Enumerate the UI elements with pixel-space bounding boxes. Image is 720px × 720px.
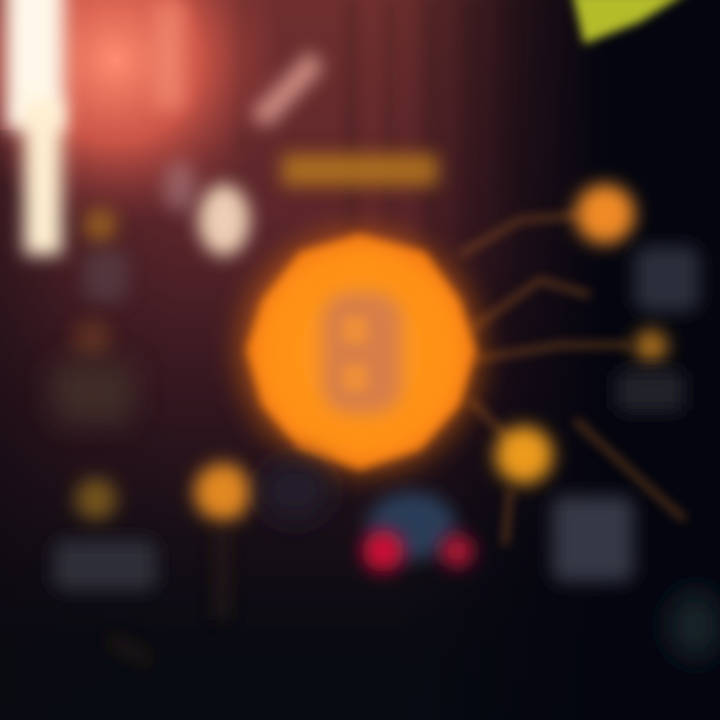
light beam: top left xyxy=(6,0,185,255)
node: top right orange xyxy=(575,184,635,244)
faint connector: lower left xyxy=(110,530,222,660)
icon: yellow-green shape top right xyxy=(572,0,688,44)
panel: far right edge xyxy=(667,589,720,661)
decorative streak: top centre xyxy=(250,50,324,128)
node: lower centre-left orange xyxy=(194,463,252,521)
left column: top icon xyxy=(83,208,128,302)
decorative blob: below coin left xyxy=(259,458,331,522)
coin symbol xyxy=(322,292,402,414)
left column: middle panel xyxy=(52,319,134,424)
panel: lower right grey xyxy=(552,496,634,582)
left column: lower panel xyxy=(54,478,156,590)
node: lower right orange xyxy=(495,426,553,484)
panel: right upper grey xyxy=(634,246,700,312)
light glow: top left xyxy=(0,0,285,225)
decorative blobs: upper left xyxy=(163,161,250,256)
central coin xyxy=(238,230,482,474)
node: right small amber xyxy=(634,329,668,363)
heading xyxy=(282,154,438,186)
panel: right middle grey xyxy=(616,370,684,412)
connector lines xyxy=(460,215,685,545)
icon: blue group with red dots xyxy=(362,492,474,572)
